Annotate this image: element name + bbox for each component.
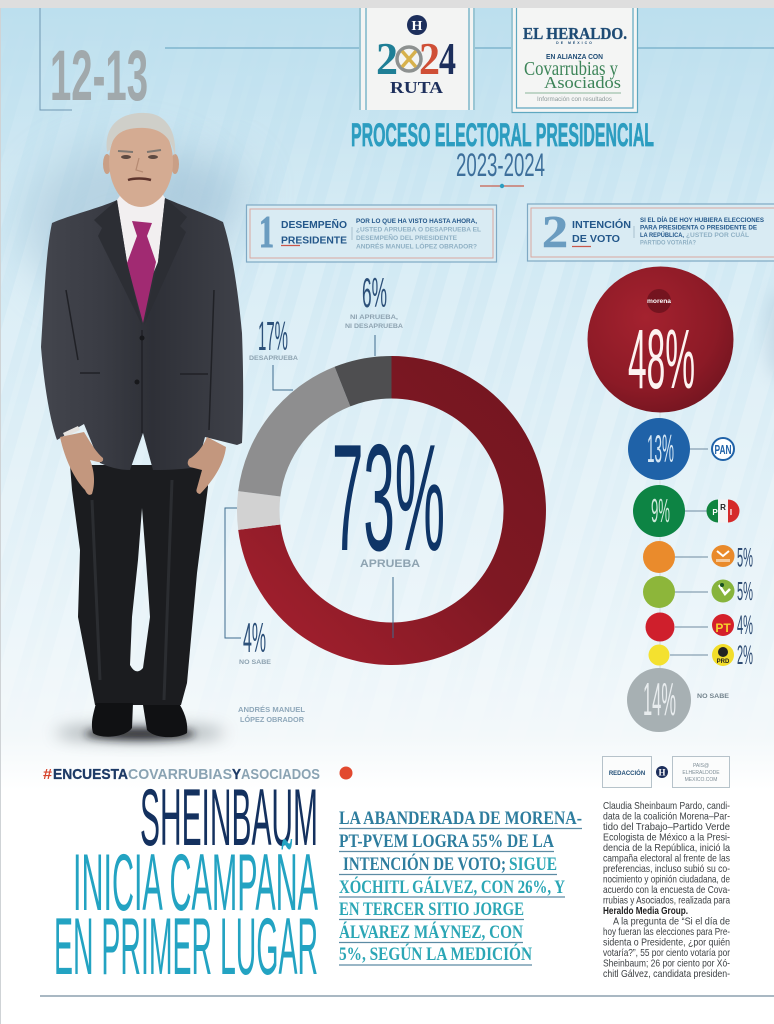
bubble: PAN 13%: [628, 418, 734, 480]
bubble: Movimiento Ciudadano 5%: [643, 541, 753, 573]
label 17% desaprueba: [249, 313, 299, 390]
caption: Andrés Manuel López Obrador: ANDRÉS MANUEL: [238, 705, 305, 714]
bubble: PRD 2%: PRD: [717, 659, 730, 665]
section header 2: intención de voto: INTENCIÓN: [572, 218, 631, 231]
text: 4%: [243, 614, 266, 661]
bubble: no sabe 14%: 14%: [643, 673, 676, 725]
hashtag: COVARRUBIAS: [128, 766, 232, 783]
hashtag: [43, 766, 320, 783]
section header 2: intención de voto: 2: [542, 207, 568, 257]
section header 1: desempeño presidente: ¿USTED APRUEBA O DESAPRUEBA EL: [356, 226, 481, 234]
subheading with underlines: XÓCHITL GÁLVEZ, CON 26%, Y: [339, 876, 565, 898]
article body text: chitl Gálvez, candidata presiden-: [603, 969, 730, 980]
cuff: [63, 426, 80, 437]
bubble: PAN 13%: PAN: [714, 442, 732, 457]
text: SHEINBAUM: [140, 773, 318, 863]
article body text: preferencias, incluso subió su co-: [603, 864, 730, 875]
bubble: PRD 2%: [648, 640, 753, 670]
label 4% no sabe: [225, 508, 271, 666]
article body text: campaña electoral al frente de las: [603, 854, 730, 864]
section header 1: desempeño presidente: DESEMPEÑO DEL PRESIDENTE: [356, 235, 457, 242]
bubble: PRI 9%: 9%: [651, 492, 670, 529]
byline: redacción: [602, 756, 730, 788]
article body text: [603, 801, 730, 980]
logo: El Heraldo and Covarrubias y Asociados: Información con resultados: [537, 97, 612, 103]
section header 2: intención de voto: ¿USTED POR CUÁL: [686, 232, 749, 239]
page number 12-13: 12-13: [50, 37, 148, 116]
neck: [120, 185, 163, 212]
section header 1: desempeño presidente: DESEMPEÑO: [281, 218, 347, 231]
bubble: Morena 48%: [588, 266, 734, 412]
main title: 2023-2024: [456, 147, 545, 183]
article body text: dencia de la República, inició la: [603, 843, 730, 854]
hands: [60, 432, 103, 495]
logo: Ruta 2024: 2: [419, 33, 440, 84]
text: 17%: [258, 313, 288, 359]
article body text: tido del Trabajo–Partido Verde: [603, 822, 730, 833]
segment: desaprueba 17%: [238, 367, 350, 496]
logo: El Heraldo and Covarrubias y Asociados: EL HERALDO.: [523, 24, 627, 43]
tie: [127, 221, 156, 323]
section header 2: intención de voto: DE VOTO: [572, 233, 620, 245]
subheading with underlines: [339, 808, 582, 965]
jacket: [41, 198, 243, 470]
shoes: [92, 703, 133, 737]
byline: redacción: MEXICO.COM: [685, 777, 717, 783]
section header 1: desempeño presidente: POR LO QUE HA VISTO HASTA AHORA,: [356, 218, 477, 225]
subheading with underlines: EN TERCER SITIO JORGE: [339, 899, 524, 920]
logo: El Heraldo and Covarrubias y Asociados: [511, 8, 638, 113]
label 6% ni aprueba ni desaprueba: NI APRUEBA,: [350, 315, 398, 321]
logo: Ruta 2024: RUTA: [390, 78, 444, 97]
section header 1: desempeño presidente: [246, 205, 496, 262]
head: [103, 154, 111, 174]
bubble: PRI 9%: [633, 485, 740, 537]
hashtag: ASOCIADOS: [241, 766, 320, 783]
subheading with underlines: ÁLVAREZ MÁYNEZ, CON: [339, 921, 523, 943]
byline: redacción: REDACCIÓN: [609, 769, 645, 777]
bubble: PVEM 5%: [643, 576, 753, 608]
bubble: PT 4%: [646, 610, 753, 642]
section header 1: desempeño presidente: ANDRÉS MANUEL LÓPEZ OBRADOR?: [356, 242, 477, 250]
segment: no sabe 4%: [237, 491, 280, 530]
article body text: hoy fueran las elecciones para Pre-: [603, 927, 730, 938]
article body text: Sheinbaum; 26 por ciento por Xó-: [603, 958, 730, 970]
segment: aprueba 73%: [238, 356, 546, 665]
subheading with underlines: PT-PVEM LOGRA 55% DE LA: [339, 831, 554, 852]
article body text: Heraldo Media Group.: [603, 906, 688, 917]
subheading with underlines: LA ABANDERADA DE MORENA-: [339, 808, 582, 829]
lapels: [94, 198, 187, 325]
segment: ni aprueba ni desaprueba 6%: [335, 356, 392, 406]
shirt: [117, 190, 165, 300]
bubble: PAN 13%: 13%: [647, 428, 674, 471]
article body text: votaría?”, 55 por ciento votaría por: [603, 948, 730, 959]
main title: [351, 117, 654, 188]
byline: redacción: H: [658, 768, 666, 778]
logo: El Heraldo and Covarrubias y Asociados: Covarrubias y: [524, 58, 618, 80]
section header 2: intención de voto: PARTIDO VOTARÍA?: [640, 238, 696, 246]
section header 2: intención de voto: PARA PRESIDENTA O PRESIDENTE DE: [640, 224, 757, 232]
article body text: Claudia Sheinbaum Pardo, candi-: [603, 801, 730, 812]
article body text: rrubias y Asociados, realizada para: [603, 896, 730, 906]
section header 1: desempeño presidente: PRESIDENTE: [281, 234, 347, 246]
logo: El Heraldo and Covarrubias y Asociados: Asociados: [544, 73, 621, 92]
logo: Ruta 2024: 4: [439, 33, 456, 84]
label 4% no sabe: NO SABE: [239, 660, 271, 666]
logo: Ruta 2024: [359, 8, 475, 110]
logo: El Heraldo and Covarrubias y Asociados: EN ALIANZA CON: [546, 52, 603, 61]
article body text: nocimiento y opinión ciudadana, de: [603, 874, 730, 886]
article body text: data de la coalición Morena–Par-: [603, 812, 730, 822]
text: INICIA CAMPAÑA: [73, 838, 318, 928]
article body text: A la pregunta de “Si el día de: [613, 916, 730, 928]
header rule: [165, 47, 774, 49]
bubble: PRI 9%: I: [730, 508, 732, 517]
bottom rule: [40, 995, 774, 997]
logo: El Heraldo and Covarrubias y Asociados: DE MÉXICO: [556, 40, 594, 45]
bubble: no sabe 14%: NO SABE: [697, 693, 730, 700]
byline: redacción: ELHERALDODE: [682, 770, 720, 776]
label 17% desaprueba: DESAPRUEBA: [249, 356, 299, 362]
subheading with underlines: 5%, SEGÚN LA MEDICIÓN: [339, 943, 532, 965]
trousers: [70, 465, 208, 705]
headline: [54, 773, 318, 992]
red dot: [340, 766, 352, 780]
article body text: Ecologista de México a la Presi-: [603, 832, 730, 844]
photo: Andrés Manuel López Obrador: [41, 113, 243, 741]
section header 2: intención de voto: LA REPÚBLICA,: [640, 232, 684, 239]
article body text: sidenta o Presidente, ¿por quién: [603, 938, 730, 948]
article body text: acuerdo con la encuesta de Cova-: [603, 885, 730, 896]
bubble: no sabe 14%: [627, 668, 730, 732]
hashtag: #: [43, 766, 53, 783]
hashtag: ENCUESTA: [53, 766, 128, 783]
section header 2: intención de voto: SI EL DÍA DE HOY HUBIERA ELECCIONES: [640, 216, 764, 224]
page number 12-13: [40, 8, 148, 116]
bubble chart: voting intention: [588, 266, 753, 732]
bubble: Morena 48%: morena: [647, 298, 671, 305]
subheading with underlines: SIGUE: [509, 854, 557, 875]
caption: Andrés Manuel López Obrador: LÓPEZ OBRADOR: [240, 715, 305, 724]
label 6% ni aprueba ni desaprueba: NI DESAPRUEBA: [345, 324, 404, 330]
section header 2: intención de voto: [528, 204, 774, 261]
donut value 73% aprueba: [332, 413, 445, 638]
text: 5%: [737, 576, 753, 606]
text: 73%: [332, 413, 445, 583]
section header 1: desempeño presidente: 1: [259, 207, 274, 257]
caption: Andrés Manuel López Obrador: [238, 705, 305, 724]
donut value 73% aprueba: APRUEBA: [360, 558, 420, 570]
bubble: PRI 9%: R: [720, 503, 726, 512]
bubble: PT 4%: PT: [715, 621, 731, 635]
label 6% ni aprueba ni desaprueba: [345, 269, 404, 356]
byline: redacción: PAIS@: [693, 763, 709, 769]
hashtag: Y: [232, 766, 241, 783]
donut chart: approval: [237, 356, 546, 665]
label 6% ni aprueba ni desaprueba: 6%: [362, 269, 387, 316]
logo: Ruta 2024: 2: [376, 33, 398, 84]
logo: Ruta 2024: H: [412, 19, 423, 34]
bubble: PRI 9%: P: [712, 508, 718, 517]
subheading with underlines: INTENCIÓN DE VOTO;: [343, 853, 506, 875]
